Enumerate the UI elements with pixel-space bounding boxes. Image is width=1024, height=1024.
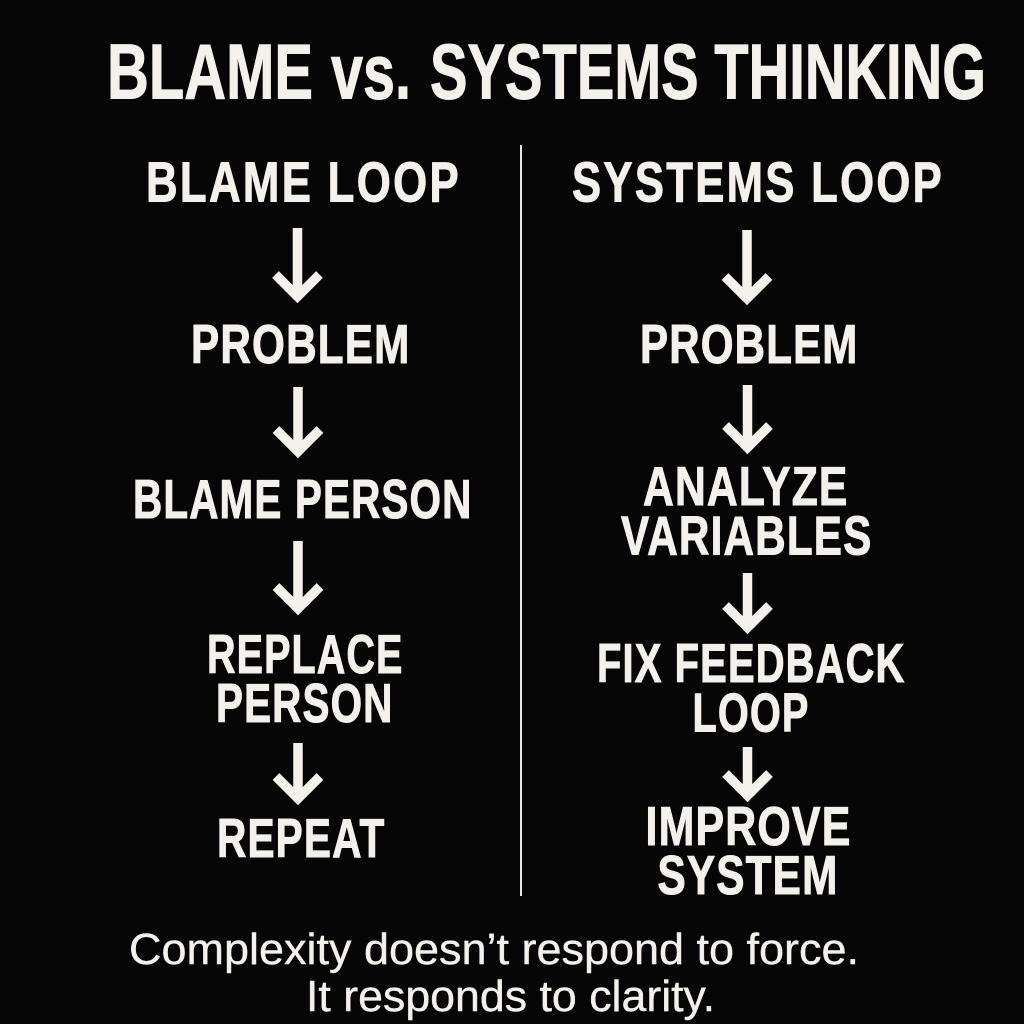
title: vs. <box>331 28 411 116</box>
step: improve system <box>646 796 852 906</box>
step: analyze variables: VARIABLES <box>621 506 872 566</box>
step: improve system: IMPROVE <box>646 796 852 857</box>
step: problem: PROBLEM <box>640 314 858 375</box>
step: fix feedback loop: FIX FEEDBACK <box>597 633 906 694</box>
step: fix feedback loop: LOOP <box>692 682 810 744</box>
step: improve system: SYSTEM <box>658 845 838 906</box>
step: fix feedback loop <box>597 633 906 744</box>
step: repeat: REPEAT <box>217 808 386 869</box>
arrow: problem to blame person <box>276 387 320 452</box>
divider between loops <box>520 145 522 896</box>
step: problem: PROBLEM <box>191 314 410 375</box>
step: analyze variables <box>621 456 872 566</box>
title: BLAME <box>107 28 313 116</box>
closing statement: It responds to clarity. <box>306 972 715 1021</box>
arrow: systems loop to problem <box>725 230 769 298</box>
panel: blame loop <box>133 150 472 869</box>
arrow: blame person to replace person <box>276 541 320 608</box>
step: replace person: REPLACE <box>207 624 404 685</box>
arrow: analyze variables to fix feedback loop <box>726 573 770 628</box>
step: blame person: BLAME PERSON <box>133 469 472 530</box>
arrow: replace person to repeat <box>276 743 320 798</box>
closing statement: Complexity doesn’t respond to force. <box>129 925 859 974</box>
arrow: fix feedback loop to improve system <box>726 747 770 796</box>
title <box>107 28 986 116</box>
panel: systems loop <box>572 150 944 906</box>
arrow: blame loop to problem <box>276 228 320 296</box>
step: replace person <box>207 624 404 734</box>
heading: blame loop: BLAME LOOP <box>146 150 461 214</box>
step: analyze variables: ANALYZE <box>643 456 848 517</box>
closing statement <box>129 925 859 1021</box>
step: replace person: PERSON <box>216 673 394 734</box>
arrow: problem to analyze variables <box>726 385 770 448</box>
